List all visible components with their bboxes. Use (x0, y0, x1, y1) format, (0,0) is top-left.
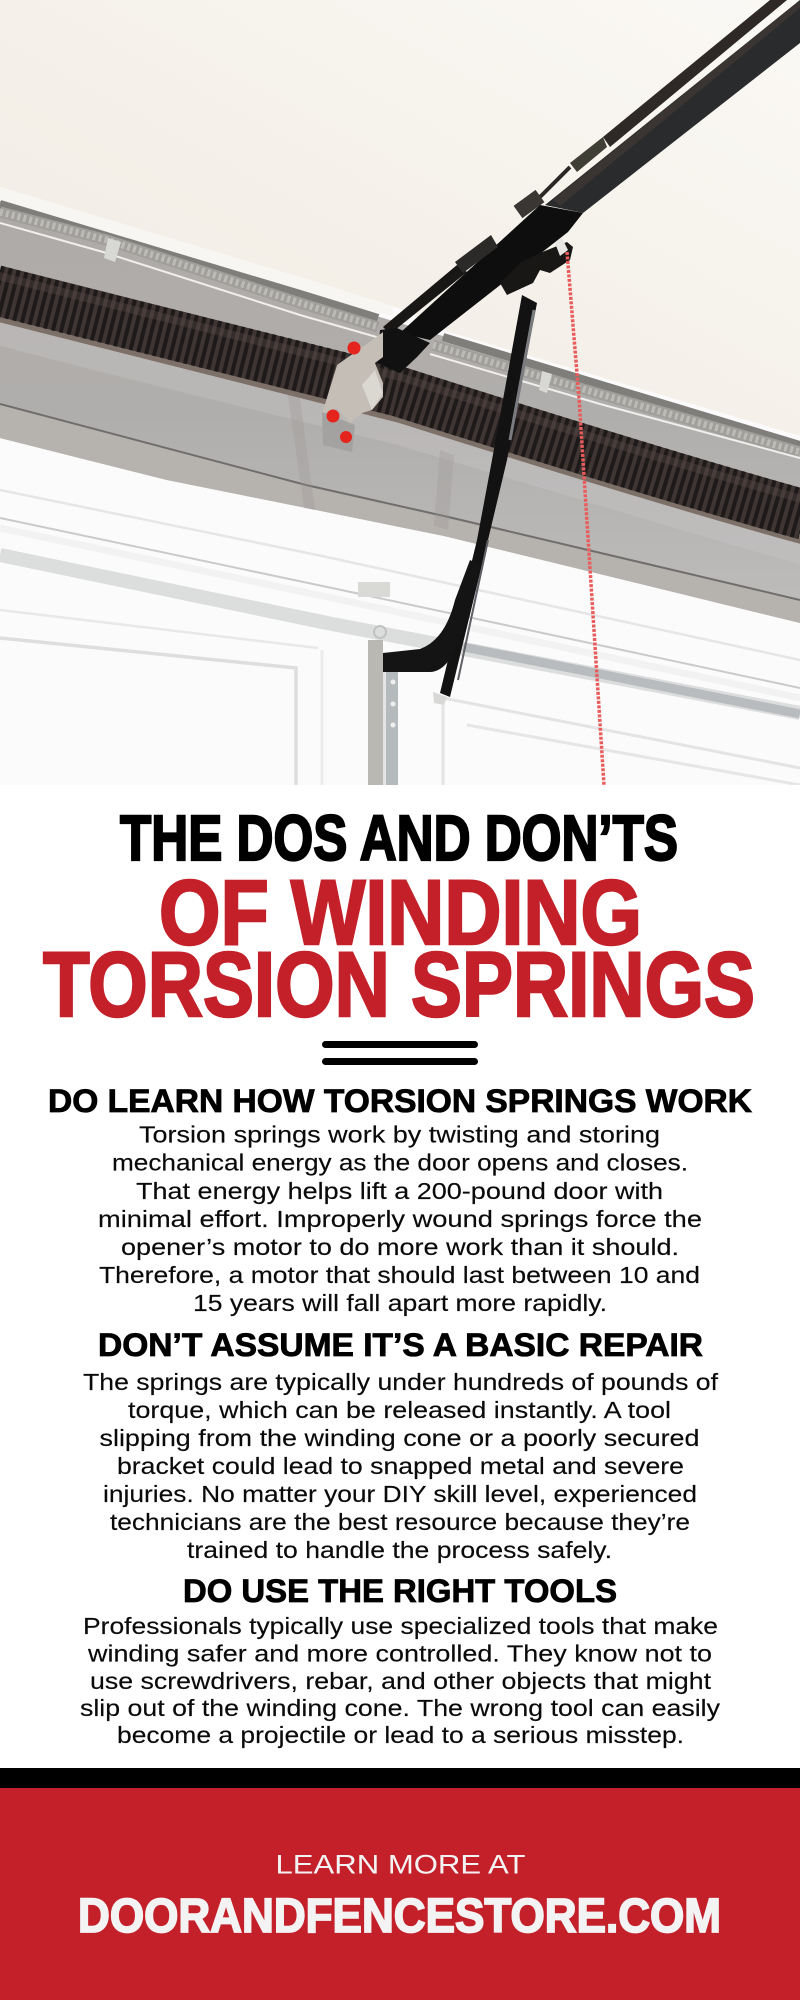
door rails and panels (0, 490, 800, 785)
body 3: Professionals typically use specialized tools that make (83, 1613, 718, 1639)
body 2: torque, which can be released instantly. A tool (128, 1397, 671, 1423)
section 1 (48, 1083, 752, 1316)
body 3: become a projectile or lead to a serious misstep. (117, 1722, 684, 1748)
title (43, 802, 755, 1036)
body 1: Torsion springs work by twisting and storing (139, 1122, 660, 1148)
body 1: mechanical energy as the door opens and closes. (112, 1150, 688, 1176)
heading 1: DO LEARN HOW TORSION SPRINGS WORK (48, 1083, 752, 1119)
rod clips (104, 238, 552, 393)
vertical steel bracket (358, 582, 398, 785)
footer panel (0, 1788, 800, 2000)
torsion spring (0, 275, 800, 541)
body 1: Therefore, a motor that should last between 10 and (99, 1262, 700, 1288)
body 3: use screwdrivers, rebar, and other objects that might (90, 1668, 712, 1694)
arm (383, 295, 537, 705)
body 2: technicians are the best resource because they’re (110, 1509, 690, 1535)
title line 2: OF WINDING (159, 862, 642, 964)
body 2: injuries. No matter your DIY skill level, experienced (103, 1481, 697, 1507)
lower track and mount (377, 205, 583, 373)
red pull rope (567, 252, 604, 785)
threaded rod and wire (0, 204, 800, 458)
section 2 (83, 1327, 719, 1563)
heading 2: DON’T ASSUME IT’S A BASIC REPAIR (98, 1327, 703, 1363)
learn more label: LEARN MORE AT (276, 1850, 526, 1880)
body 3 (80, 1613, 721, 1748)
header wall (0, 200, 800, 623)
body 2: The springs are typically under hundreds of pounds of (83, 1369, 719, 1395)
ceiling (0, 0, 800, 436)
divider (322, 1041, 478, 1065)
body 1 (98, 1122, 702, 1316)
body 2: trained to handle the process safely. (187, 1537, 612, 1563)
body 3: winding safer and more controlled. They know not to (87, 1640, 712, 1666)
body 2: slipping from the winding cone or a poorly secured (100, 1425, 700, 1451)
photo: garage door torsion spring (0, 0, 800, 785)
clamp (322, 332, 383, 452)
body 2 (83, 1369, 719, 1563)
body 1: opener’s motor to do more work than it should. (121, 1234, 679, 1260)
arm elbow (383, 560, 480, 672)
white ceiling edge trim (0, 187, 393, 316)
body 1: 15 years will fall apart more rapidly. (193, 1290, 607, 1316)
section 3 (80, 1573, 721, 1748)
body 1: That energy helps lift a 200-pound door with (136, 1178, 663, 1204)
body 1: minimal effort. Improperly wound springs force the (98, 1206, 702, 1232)
opener track beam (518, 0, 800, 213)
body 2: bracket could lead to snapped metal and severe (117, 1453, 684, 1479)
wall shadow line and lower band (0, 438, 800, 623)
title line 1: THE DOS AND DON’TS (120, 802, 678, 874)
heading 3: DO USE THE RIGHT TOOLS (183, 1573, 617, 1609)
body 3: slip out of the winding cone. The wrong tool can easily (80, 1695, 721, 1721)
black band (0, 1768, 800, 1788)
wall streaks (288, 395, 454, 530)
website url: DOORANDFENCESTORE.COM (78, 1890, 721, 1943)
